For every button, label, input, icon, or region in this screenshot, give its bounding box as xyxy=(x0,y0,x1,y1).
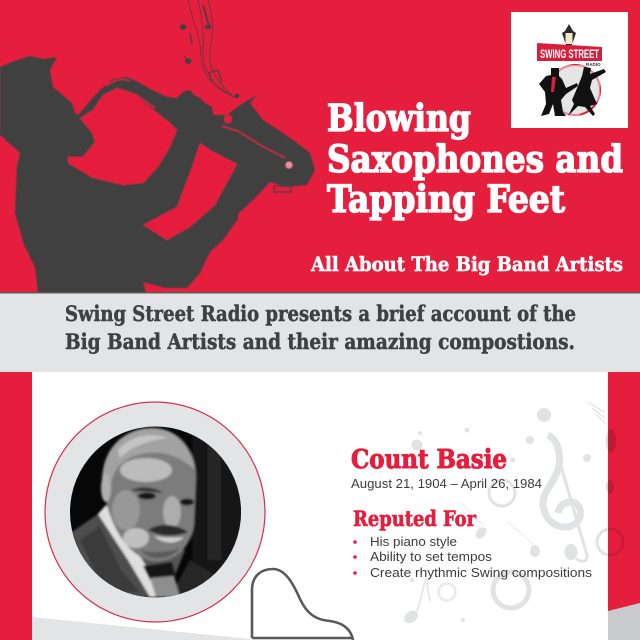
red side borders xyxy=(0,372,640,640)
title xyxy=(327,96,623,221)
space between sax neck and chest xyxy=(68,88,177,185)
face highlights xyxy=(120,458,172,482)
logo: Swing Street Radio xyxy=(511,12,628,128)
illustration: musical staff and notes xyxy=(180,0,239,98)
reputed for list: His piano style xyxy=(370,534,457,549)
bottom grey wedge xyxy=(32,617,250,640)
suit xyxy=(72,514,155,600)
intro text: Swing Street Radio presents a brief account of the xyxy=(65,301,576,326)
gap between the arms xyxy=(143,143,237,240)
mouth area xyxy=(148,525,188,536)
hair xyxy=(102,428,195,490)
neck xyxy=(140,548,186,575)
treble clef xyxy=(543,435,587,561)
tie xyxy=(143,562,176,580)
intro text xyxy=(65,301,576,354)
illustration: saxophone player silhouette xyxy=(0,56,315,293)
reputed for list xyxy=(353,534,593,580)
title: Saxophones and xyxy=(327,137,623,181)
reputed for list: Create rhythmic Swing compositions xyxy=(370,565,593,580)
intro text: Big Band Artists and their amazing compostions. xyxy=(65,329,575,354)
header panel xyxy=(0,0,640,293)
artist details xyxy=(351,445,593,580)
artist name: Count Basie xyxy=(351,445,507,475)
intro band xyxy=(0,292,640,372)
background music notes xyxy=(402,402,623,626)
eyes and brows xyxy=(130,487,163,493)
lamp post xyxy=(562,24,576,45)
head xyxy=(103,428,196,561)
subtitle: All About The Big Band Artists xyxy=(310,252,623,276)
saxophone highlights xyxy=(106,79,285,158)
artist dates: August 21, 1904 – April 26, 1984 xyxy=(351,476,542,491)
photo: Count Basie portrait xyxy=(72,427,244,600)
street sign xyxy=(537,43,602,67)
title: Tapping Feet xyxy=(327,177,566,221)
reputed for list: Ability to set tempos xyxy=(370,549,493,564)
ear xyxy=(101,474,111,502)
street sign: RADIO xyxy=(586,62,601,67)
icon: piano outline xyxy=(252,569,353,640)
reputed for heading: Reputed For xyxy=(353,506,477,531)
street sign: SWING STREET xyxy=(540,47,599,61)
dancers in a circle xyxy=(539,65,606,118)
shirt and collar xyxy=(98,505,158,597)
title: Blowing xyxy=(327,96,471,140)
portrait frame xyxy=(45,402,265,622)
